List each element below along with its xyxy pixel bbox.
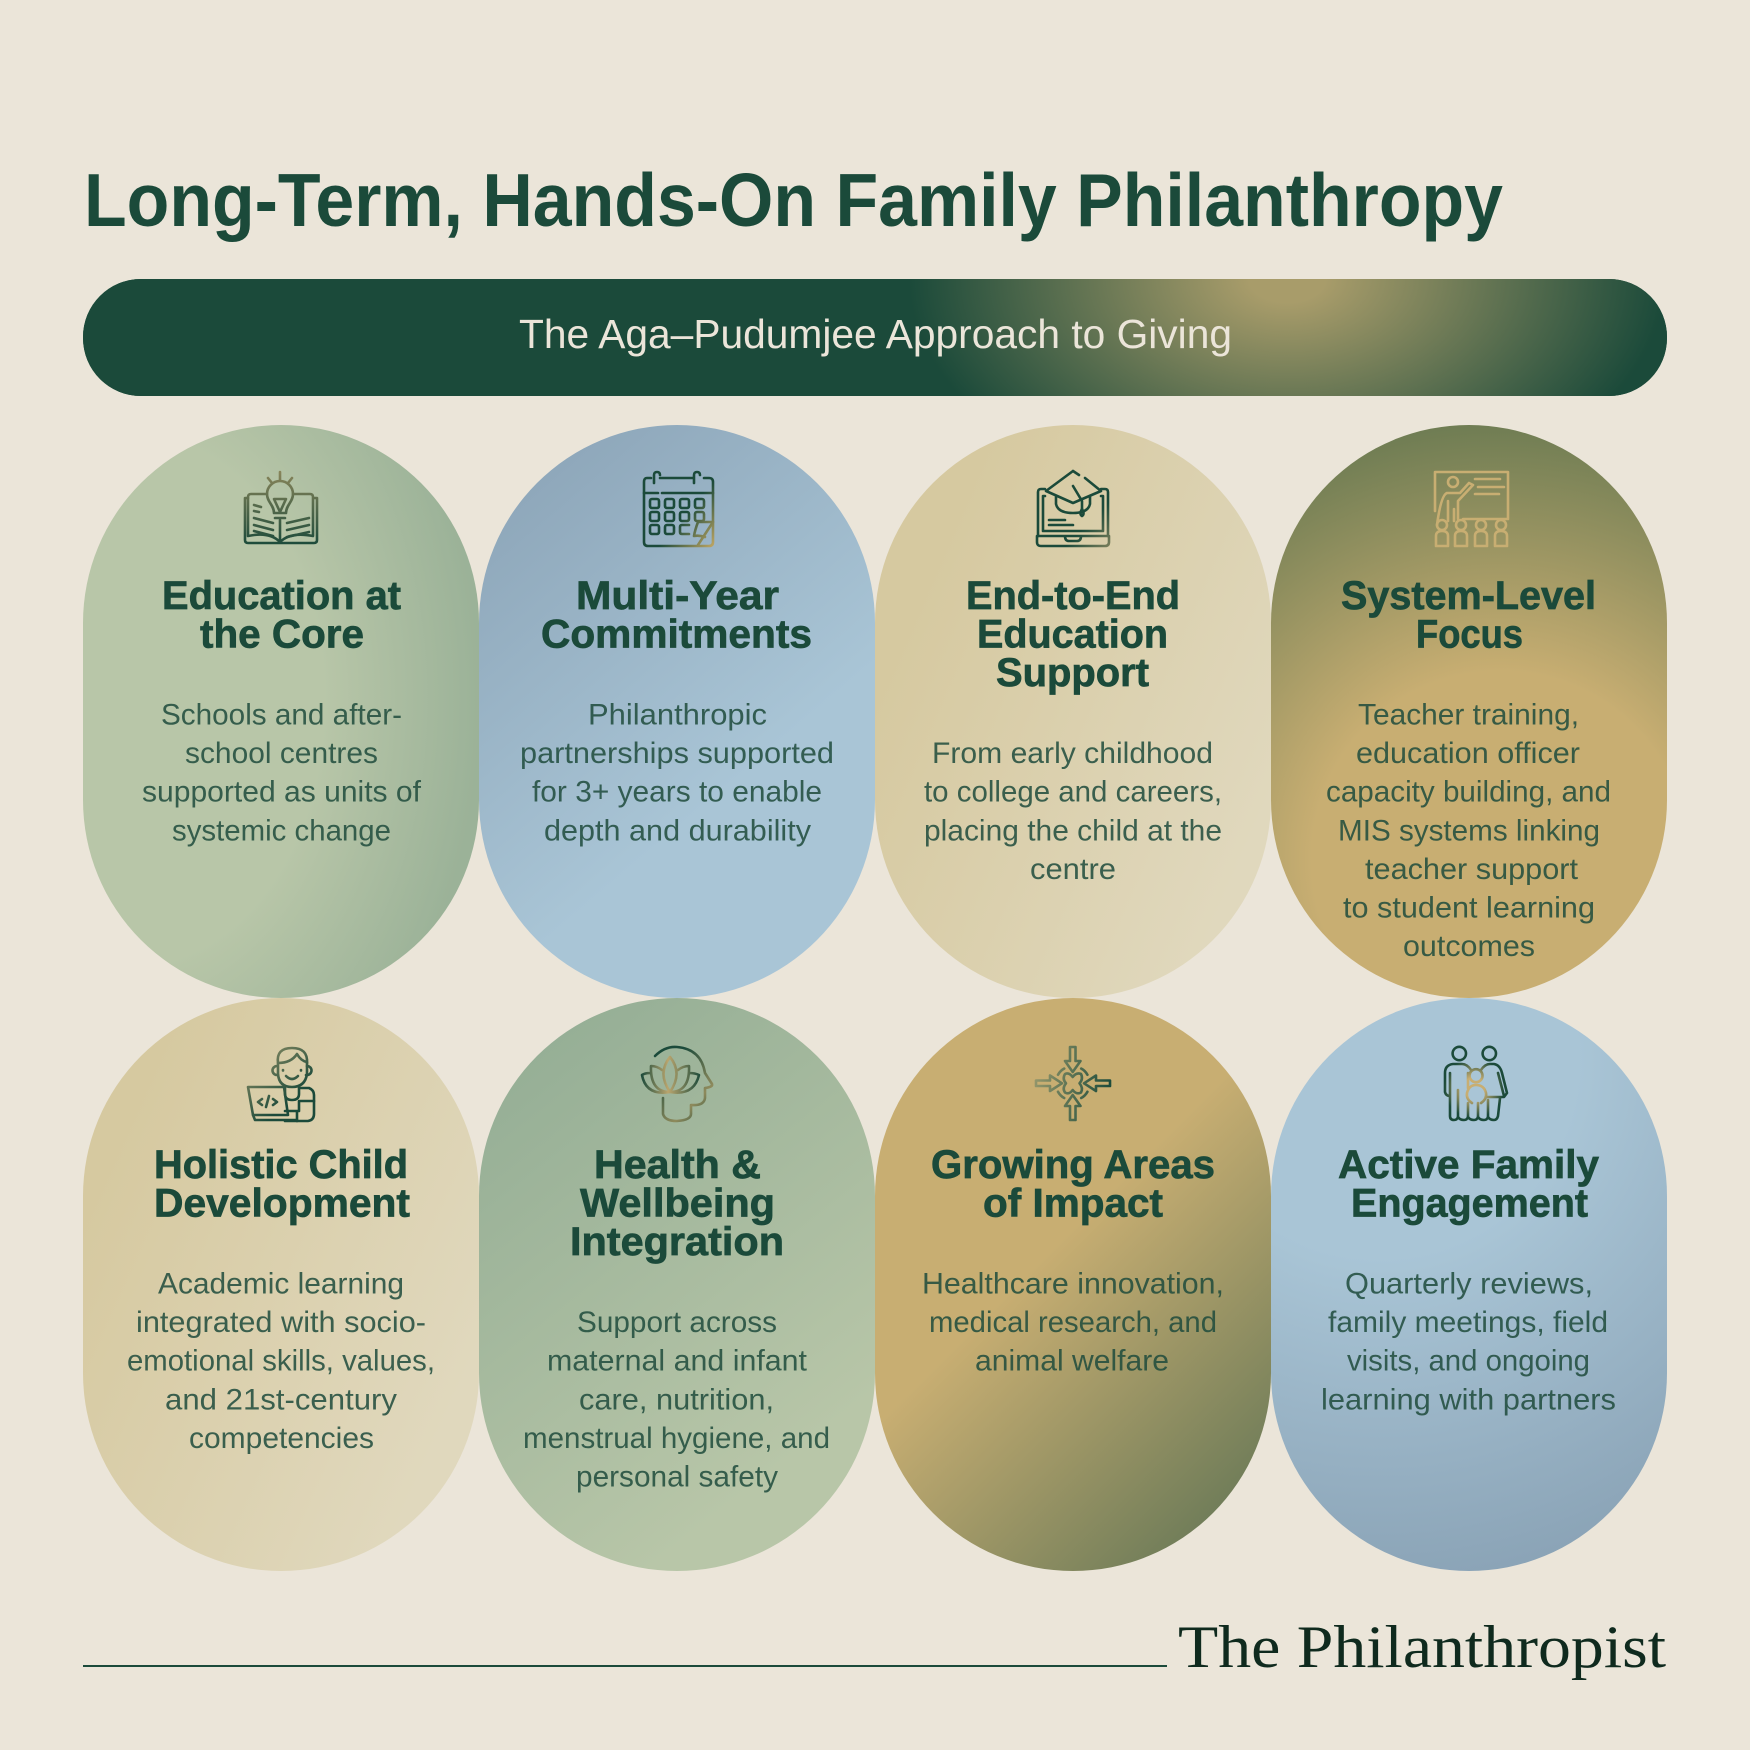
panel: Multi-Year Commitments bbox=[479, 425, 875, 998]
heading: Development bbox=[154, 1182, 410, 1226]
description: integrated with socio- bbox=[136, 1306, 426, 1339]
heading: the Core bbox=[200, 612, 364, 656]
icon: calendar bbox=[644, 472, 713, 546]
description: outcomes bbox=[1403, 930, 1535, 963]
icon: open book with light bulb bbox=[245, 472, 317, 543]
description: Schools and after- bbox=[161, 698, 402, 732]
description: supported as units of bbox=[142, 776, 422, 809]
heading bbox=[931, 1143, 1215, 1226]
heading: Multi-Year bbox=[576, 574, 779, 618]
heading bbox=[162, 574, 401, 656]
panel: Education at the Core bbox=[83, 425, 479, 998]
description: school centres bbox=[185, 737, 378, 770]
description: competencies bbox=[189, 1422, 374, 1455]
description bbox=[1326, 698, 1611, 963]
description: placing the child at the bbox=[924, 814, 1222, 847]
description: MIS systems linking bbox=[1338, 814, 1600, 847]
description bbox=[922, 1268, 1224, 1378]
footer brand: The Philanthropist bbox=[1178, 1614, 1666, 1680]
description: From early childhood bbox=[932, 737, 1213, 770]
heading: Education at bbox=[162, 574, 401, 618]
heading: Health & bbox=[594, 1143, 761, 1187]
heading: End-to-End bbox=[966, 574, 1180, 618]
heading bbox=[541, 574, 812, 656]
icon: teacher and students bbox=[1435, 472, 1508, 546]
title: Long-Term, Hands-On Family Philanthropy bbox=[84, 158, 1503, 242]
heading: Support bbox=[996, 651, 1149, 695]
panel: Active Family Engagement bbox=[1271, 998, 1667, 1571]
description: teacher support bbox=[1365, 853, 1579, 886]
description: to student learning bbox=[1343, 892, 1595, 924]
description: family meetings, field bbox=[1328, 1306, 1608, 1339]
panel: System-Level Focus bbox=[1271, 425, 1667, 998]
description: menstrual hygiene, and bbox=[523, 1422, 830, 1455]
heading: Focus bbox=[1416, 612, 1523, 656]
description: systemic change bbox=[172, 814, 391, 847]
description bbox=[924, 737, 1222, 886]
description: learning with partners bbox=[1321, 1383, 1616, 1416]
heading: Integration bbox=[570, 1220, 784, 1264]
panel: Growing Areas of Impact bbox=[875, 998, 1271, 1571]
subtitle banner bbox=[83, 279, 1667, 396]
heading: Holistic Child bbox=[154, 1143, 408, 1187]
description: care, nutrition, bbox=[579, 1383, 774, 1416]
description: animal welfare bbox=[975, 1345, 1169, 1378]
panel: Health & Wellbeing Integration bbox=[479, 998, 875, 1571]
description: for 3+ years to enable bbox=[532, 776, 822, 809]
heading: Engagement bbox=[1351, 1182, 1588, 1226]
heading bbox=[1338, 1143, 1600, 1226]
description: and 21st-century bbox=[165, 1383, 397, 1416]
description: emotional skills, values, bbox=[127, 1345, 435, 1378]
icon: laptop with graduation cap bbox=[1037, 471, 1109, 546]
description: medical research, and bbox=[929, 1306, 1217, 1339]
description: Teacher training, bbox=[1358, 698, 1579, 732]
description: Quarterly reviews, bbox=[1345, 1268, 1593, 1300]
description: visits, and ongoing bbox=[1347, 1345, 1590, 1378]
heading: Growing Areas bbox=[931, 1143, 1215, 1187]
icon: head with lotus bbox=[642, 1047, 712, 1121]
description: personal safety bbox=[576, 1460, 778, 1494]
heading: Wellbeing bbox=[580, 1182, 775, 1226]
icon: family bbox=[1445, 1047, 1507, 1120]
description bbox=[1321, 1268, 1616, 1416]
description: education officer bbox=[1356, 737, 1580, 770]
heading bbox=[154, 1143, 410, 1226]
description: partnerships supported bbox=[520, 737, 834, 770]
heading: System-Level bbox=[1341, 574, 1596, 618]
heading bbox=[570, 1143, 784, 1264]
icon: arrows converging on centre bbox=[1036, 1047, 1110, 1120]
footer rule bbox=[83, 1665, 1167, 1667]
description: depth and durability bbox=[544, 814, 811, 847]
heading: Education bbox=[977, 612, 1168, 656]
description bbox=[520, 698, 834, 847]
panel: Holistic Child Development bbox=[83, 998, 479, 1571]
description: Academic learning bbox=[158, 1268, 404, 1300]
description bbox=[523, 1306, 830, 1494]
heading bbox=[966, 574, 1180, 695]
subtitle text: The Aga–Pudumjee Approach to Giving bbox=[519, 311, 1232, 357]
heading bbox=[1341, 574, 1596, 656]
description: Support across bbox=[577, 1306, 777, 1339]
description: maternal and infant bbox=[547, 1345, 808, 1378]
description: centre bbox=[1030, 853, 1116, 886]
panel: End-to-End Education Support bbox=[875, 425, 1271, 998]
heading: Commitments bbox=[541, 612, 812, 656]
description: Healthcare innovation, bbox=[922, 1268, 1224, 1300]
icon: child at laptop bbox=[248, 1048, 314, 1121]
description bbox=[127, 1268, 435, 1455]
description: capacity building, and bbox=[1326, 776, 1611, 809]
heading: Active Family bbox=[1338, 1143, 1600, 1187]
heading: of Impact bbox=[983, 1182, 1163, 1226]
description: Philanthropic bbox=[588, 698, 767, 732]
description: to college and careers, bbox=[924, 776, 1222, 809]
description bbox=[142, 698, 422, 847]
